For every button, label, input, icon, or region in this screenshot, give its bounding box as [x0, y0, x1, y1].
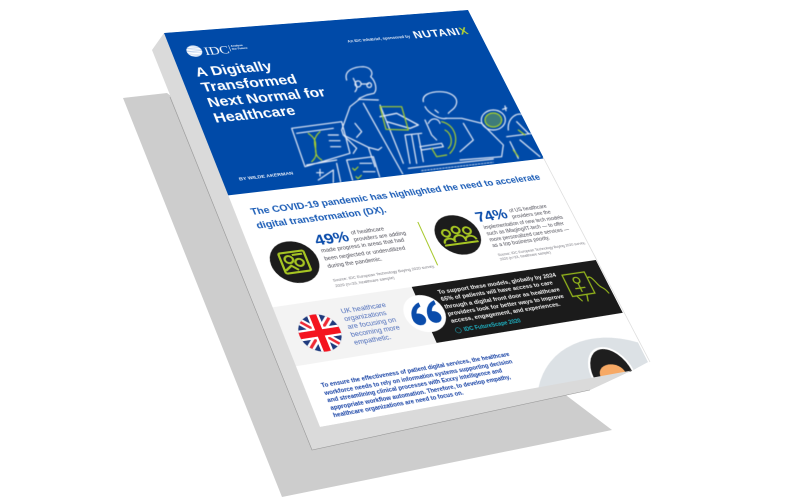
scientist figure	[405, 92, 503, 171]
body paragraph: appropriate workflow automation. Therefore, to develop empathy,	[329, 374, 512, 411]
callout text: access, engagement, and experiences.	[450, 301, 562, 324]
petri dish and lab equipment	[481, 106, 540, 158]
header panel	[164, 10, 544, 195]
IDC logo: Analyze	[230, 44, 243, 48]
link: IDC FutureScape 2020	[463, 318, 522, 333]
callout text: 65% of patients will have access to care	[440, 280, 554, 303]
title: A Digitally	[193, 59, 275, 80]
IDC logo: IDC	[202, 43, 231, 58]
title: Healthcare	[211, 104, 298, 126]
stat text: implementation of new tech models	[483, 215, 564, 231]
icon: black circle with lime people	[434, 214, 482, 255]
stat text: such as IMaging/IT-tech — to offer	[486, 221, 565, 237]
callout text: through a digital front door as healthcare	[443, 286, 561, 310]
stat text: providers see the	[511, 210, 552, 220]
stat text: been neglected or underutilized	[323, 245, 406, 262]
infographic page	[164, 10, 651, 427]
Nutanix logo: NUTANIX	[411, 26, 471, 41]
stat text: providers are adding	[353, 230, 407, 243]
title	[193, 59, 328, 126]
heading: The COVID-19 pandemic has highlighted the need to accelerate	[249, 172, 542, 217]
doctor figure	[342, 67, 418, 175]
IDC logo	[186, 43, 248, 58]
body paragraph: workforce needs to rely on information systems supporting decision	[323, 359, 514, 397]
icon: lime monitor and circuit	[560, 271, 610, 302]
stat text: during the pandemic.	[326, 256, 383, 270]
stat text: made progress in areas that had	[320, 237, 405, 254]
source note: Source: IDC European Technology Buying 2020 survey,	[332, 264, 435, 283]
sponsor line: An IDC InfoBrief, sponsored by	[346, 34, 411, 43]
stat: 49 percent	[269, 226, 435, 288]
panel: UK healthcare band	[273, 287, 437, 366]
callout text: To support these models, globally by 2024	[437, 272, 557, 296]
stat text: as a top business priority.	[491, 236, 551, 249]
UK text: are focusing on	[346, 316, 397, 331]
heading: digital transformation (DX).	[255, 205, 388, 231]
body paragraph: and streamlining clinical processes with Exxxy intelligence and	[326, 368, 503, 404]
UK text: organizations	[343, 309, 388, 323]
icon: UK flag	[298, 314, 426, 352]
author line: BY WILDE AKERMAN	[238, 171, 294, 182]
body paragraph: To ensure the effectiveness of patient digital services, the healthcare	[320, 352, 511, 389]
number: 49%	[312, 228, 352, 249]
number: 74%	[472, 206, 511, 225]
source note: Source: IDC European Technology Buying 2020 survey,	[497, 242, 586, 257]
UK text: empathetic.	[353, 333, 392, 346]
body paragraph	[298, 300, 514, 419]
callout text: providers look for better ways to improve	[446, 293, 565, 317]
header illustration: doctor and scientist	[290, 65, 542, 184]
stat text: of US healthcare	[508, 204, 548, 214]
source note: 2020 (n=33, healthcare sample)	[499, 251, 552, 261]
icon: quotation mark	[411, 300, 442, 326]
title: Next Normal for	[205, 85, 328, 110]
UK text: UK healthcare	[340, 301, 387, 315]
UK text: becoming more	[349, 324, 401, 338]
body paragraph: healthcare organizations are need to focus on.	[332, 390, 465, 419]
stat: 74 percent	[434, 204, 586, 261]
icon: black circle with lime document	[269, 241, 320, 284]
title: Transformed	[199, 72, 299, 95]
UK text	[340, 301, 401, 346]
person illustration	[435, 300, 648, 388]
quote badge	[397, 292, 453, 335]
callout text	[436, 272, 565, 324]
stat text: of healthcare	[350, 226, 385, 236]
source note: 2020 (n=33, healthcare sample)	[334, 275, 395, 288]
stat text	[320, 226, 407, 270]
IDC logo: the Future	[232, 47, 248, 51]
stat text	[482, 204, 570, 249]
stat text: more personalized care services —	[489, 227, 570, 243]
monitor with DNA	[292, 122, 382, 188]
panel: black callout	[412, 260, 623, 343]
